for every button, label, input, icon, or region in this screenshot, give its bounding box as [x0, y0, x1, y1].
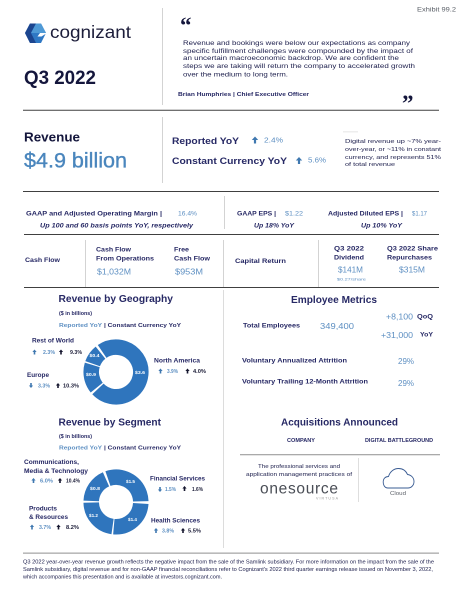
digital revenue note: of total revenue [345, 162, 395, 168]
label: rest of world: 9.3% [70, 350, 83, 356]
panel: revenue by segment [24, 416, 206, 534]
label: communications, media & technology: Communications, [24, 460, 79, 466]
free cash flow: $953M [175, 268, 203, 277]
heading: Employee Metrics [291, 294, 377, 306]
capital return label: Capital Return [235, 258, 286, 265]
CEO quote text: specific fulfillment challenges were compounded by the impact of [183, 48, 413, 55]
table headers: COMPANY [287, 438, 316, 444]
label: products & resources: & Resources [29, 515, 69, 521]
legend: Reported YoY [59, 446, 102, 452]
digital revenue note: currency, and represents 51% [345, 155, 441, 161]
cash flow label: Cash Flow [25, 257, 60, 264]
reported YoY [172, 136, 283, 147]
dividend: $0.27/share [337, 277, 366, 281]
logo: onesource: VIRTUSA [316, 496, 339, 500]
label: financial services: Financial Services [150, 477, 206, 483]
dividend [334, 246, 366, 281]
cloud label: Cloud [390, 491, 406, 497]
GAAP EPS [237, 211, 304, 229]
label: europe: 10.3% [63, 383, 80, 389]
label: products & resources: 8.2% [66, 525, 80, 531]
icon: hexagon mark [25, 24, 47, 43]
table headers: DIGITAL BATTLEGROUND [365, 438, 433, 444]
donut chart: $0.8 [90, 486, 100, 491]
trailing attrition: Voluntary Trailing 12-Month Attrition [242, 379, 368, 386]
panel: revenue by geography [27, 293, 207, 407]
icon: opening quote: “ [180, 13, 192, 38]
icon: closing quote: ” [402, 91, 414, 116]
legend [59, 446, 181, 452]
donut chart: $0.4 [90, 353, 100, 358]
footnote [23, 560, 434, 581]
dividend: Dividend [334, 255, 364, 262]
donut chart: $0.9 [86, 372, 96, 377]
label: health sciences [151, 519, 202, 534]
total employees: Total Employees [243, 323, 301, 330]
legend: | Constant Currency YoY [104, 446, 181, 452]
digital revenue note [343, 132, 442, 168]
heading: Acquisitions Announced [281, 416, 398, 428]
footnote: which accompanies this presentation and is available at investors.cognizant.com. [23, 575, 222, 581]
annualized attrition [242, 356, 414, 366]
cash flow from operations: Cash Flow [96, 247, 131, 254]
label: communications, media & technology: 10.4% [66, 478, 81, 484]
revenue headline [24, 130, 127, 172]
company description: application management practices of [246, 472, 353, 478]
share repurchases: Q3 2022 Share [387, 246, 439, 253]
label: north america [154, 359, 207, 375]
legend [59, 323, 181, 329]
cash flow row [25, 247, 210, 277]
heading: Revenue by Geography [58, 293, 173, 305]
donut chart [84, 470, 148, 534]
panel: acquisitions announced [240, 416, 440, 502]
label: north america: North America [154, 359, 201, 365]
CEO quote text: Revenue and bookings were below our expectations as company [183, 40, 411, 47]
label: north america: 4.0% [193, 369, 207, 375]
company description [246, 464, 353, 478]
capital return row [235, 246, 439, 281]
adjusted diluted EPS: Up 10% YoY [361, 222, 403, 229]
CEO quote text: over the medium to long term. [183, 71, 288, 78]
constant currency YoY [172, 156, 326, 167]
label: europe [27, 373, 80, 389]
total employees: +8,100 [386, 312, 413, 322]
label: north america: 3.9% [167, 369, 179, 375]
constant currency YoY: 5.6% [308, 156, 326, 164]
label: financial services: 1.6% [192, 487, 204, 493]
annualized attrition: 29% [398, 356, 414, 366]
share repurchases: Repurchases [387, 255, 433, 262]
label: rest of world: Rest of World [32, 339, 74, 345]
operating margin: GAAP and Adjusted Operating Margin | [26, 211, 162, 218]
legend: Reported YoY [59, 323, 102, 329]
heading: Revenue by Segment [58, 416, 161, 428]
company description: The professional services and [258, 464, 340, 470]
adjusted diluted EPS: $1.17 [412, 211, 428, 218]
donut chart: $3.6 [135, 370, 145, 375]
panel: employee metrics [242, 294, 434, 388]
CEO quote text: an uncertain macroeconomic backdrop. We are confident the [183, 55, 399, 62]
label: rest of world [32, 339, 83, 356]
CEO quote text [183, 40, 415, 78]
cash flow from operations: $1,032M [97, 268, 131, 277]
unit note: ($ in billions) [59, 311, 92, 317]
donut chart: $1.2 [89, 513, 98, 518]
donut chart: $1.4 [128, 517, 137, 522]
GAAP EPS: Up 18% YoY [254, 222, 295, 229]
logo: cognizant [25, 22, 131, 43]
label: products & resources: 3.7% [39, 525, 52, 531]
label: products & resources: Products [29, 507, 58, 513]
dividend: Q3 2022 [334, 246, 365, 253]
trailing attrition [242, 378, 414, 388]
wordmark: cognizant [50, 22, 131, 42]
total employees: 349,400 [320, 321, 354, 331]
label: rest of world: 2.3% [43, 350, 56, 356]
label: products & resources [29, 507, 80, 531]
annualized attrition: Voluntary Annualized Attrition [242, 358, 347, 365]
label: health sciences: Health Sciences [151, 519, 201, 525]
label: europe: Europe [27, 373, 50, 379]
table headers [287, 438, 433, 444]
footnote: Q3 2022 year-over-year revenue growth reflects the negative impact from the sale of the Samlink subsidiary. For more information on the impact from the sale of the [23, 560, 434, 566]
GAAP EPS: GAAP EPS | [237, 211, 276, 218]
share repurchases: $315M [399, 266, 425, 275]
operating margin: Up 100 and 60 basis points YoY, respectively [40, 222, 194, 229]
unit note: ($ in billions) [59, 434, 92, 440]
total employees [243, 312, 434, 340]
free cash flow: Cash Flow [174, 256, 210, 263]
CEO quote text: steps we are taking will return the company to accelerated growth [183, 63, 415, 70]
label: europe: 3.3% [38, 383, 51, 389]
total employees: +31,000 [381, 330, 413, 340]
label: communications, media & technology: 6.0% [40, 478, 54, 484]
label: health sciences: 3.8% [162, 528, 175, 534]
dividend: $141M [338, 266, 363, 275]
free cash flow [174, 247, 210, 277]
reported YoY: 2.4% [264, 136, 283, 144]
adjusted diluted EPS [328, 211, 428, 229]
label: communications, media & technology [24, 460, 89, 484]
digital revenue note: Digital revenue up ~7% year- [345, 139, 441, 145]
exhibit label: Exhibit 99.2 [417, 6, 457, 14]
logo: onesource: onesource [260, 480, 338, 498]
label: communications, media & technology: Media & Technology [24, 469, 89, 475]
constant currency YoY: Constant Currency YoY [172, 156, 288, 167]
title: Q3 2022: Q3 2022 [24, 67, 96, 89]
revenue headline: $4.9 billion [24, 150, 127, 172]
GAAP EPS: $1.22 [285, 211, 304, 218]
cash flow from operations [96, 247, 155, 277]
operating margin: 16.4% [178, 211, 198, 218]
label: financial services [150, 477, 206, 493]
label: financial services: 1.5% [165, 487, 177, 493]
icon: cloud [383, 468, 414, 488]
free cash flow: Free [174, 247, 190, 254]
adjusted diluted EPS: Adjusted Diluted EPS | [328, 211, 403, 218]
total employees: YoY [420, 332, 434, 339]
legend: | Constant Currency YoY [104, 323, 181, 329]
donut chart: $1.5 [126, 479, 135, 484]
digital revenue note: over-year, or ~11% in constant [345, 147, 442, 153]
quote attribution: Brian Humphries | Chief Executive Officer [178, 92, 310, 98]
operating margin [26, 211, 198, 229]
revenue headline: Revenue [24, 130, 80, 144]
cash flow from operations: From Operations [96, 256, 155, 263]
label: health sciences: 5.5% [188, 528, 202, 534]
total employees: QoQ [417, 314, 433, 321]
reported YoY: Reported YoY [172, 136, 240, 147]
trailing attrition: 29% [398, 378, 414, 388]
footnote: Samlink subsidiary, digital revenue and for non-GAAP financial reconciliations refer to Cognizant's 2022 third quarter earnings release issued on November 3, 2022, [23, 567, 433, 573]
share repurchases [387, 246, 439, 275]
donut chart [81, 337, 151, 407]
